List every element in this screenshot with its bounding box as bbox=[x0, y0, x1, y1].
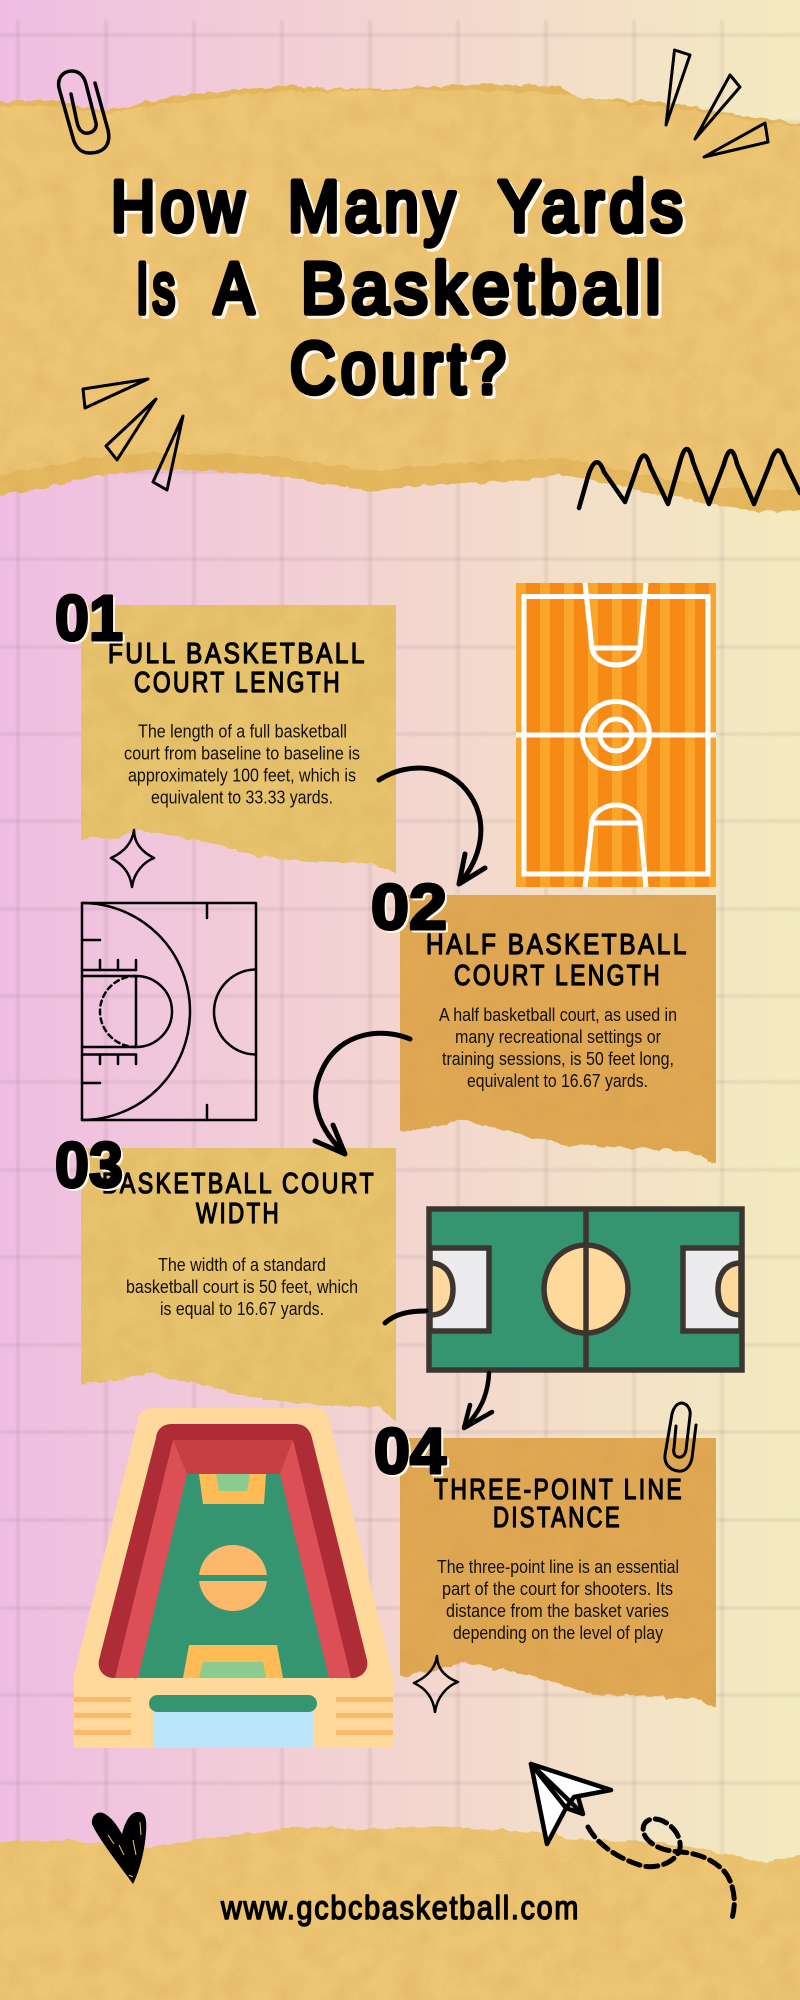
heading 2 bbox=[426, 929, 689, 992]
title: Court? bbox=[290, 329, 511, 409]
panel 1: full basketball court length bbox=[81, 605, 396, 874]
title: A bbox=[214, 249, 259, 329]
heading 2: HALF BASKETBALL bbox=[426, 929, 689, 961]
torn paper footer band bbox=[0, 1827, 800, 2000]
illustration: arcade court bbox=[74, 1408, 393, 1748]
arrow: panel 2 to panel 3 bbox=[315, 1033, 410, 1154]
body text 1: approximately 100 feet, which is bbox=[128, 766, 356, 786]
panel 3: basketball court width bbox=[81, 1148, 396, 1422]
torn paper title band bbox=[0, 84, 800, 512]
body text 3 bbox=[126, 1255, 358, 1319]
heading 4: THREE-POINT LINE bbox=[434, 1474, 684, 1506]
heading 3 bbox=[102, 1168, 376, 1230]
panel 4: three-point line distance bbox=[400, 1438, 716, 1708]
body text 4: depending on the level of play bbox=[453, 1623, 663, 1643]
icon: spikes top right bbox=[666, 50, 768, 157]
body text 4: The three-point line is an essential bbox=[437, 1557, 679, 1577]
body text 2: training sessions, is 50 feet long, bbox=[442, 1049, 674, 1069]
icon: spikes lower left bbox=[83, 379, 183, 490]
body text 1: court from baseline to baseline is bbox=[124, 744, 360, 764]
panel 2: half basketball court length bbox=[400, 895, 716, 1164]
title: Basketball bbox=[301, 249, 666, 329]
illustration: line drawing half court bbox=[82, 903, 256, 1120]
icon: sparkle 1 bbox=[111, 830, 154, 887]
heading 1 bbox=[108, 638, 367, 699]
arrow: panel 1 to panel 2 bbox=[379, 768, 485, 884]
heading 2: COURT LENGTH bbox=[454, 960, 662, 992]
arrow: connector from panel 3 bbox=[385, 1311, 426, 1323]
body text 2: equivalent to 16.67 yards. bbox=[467, 1071, 648, 1091]
icon: zigzag bbox=[579, 449, 800, 508]
icon: paperclip top left bbox=[59, 71, 109, 153]
illustration: green court bbox=[429, 1209, 742, 1370]
title: Yards bbox=[498, 167, 688, 247]
body text 1: The length of a full basketball bbox=[138, 722, 347, 742]
body text 4 bbox=[437, 1557, 679, 1643]
body text 3: The width of a standard bbox=[158, 1255, 326, 1275]
heading 3: BASKETBALL COURT bbox=[102, 1168, 376, 1200]
body text 3: is equal to 16.67 yards. bbox=[160, 1299, 324, 1319]
body text 1 bbox=[124, 722, 360, 808]
footer url: www.gcbcbasketball.com bbox=[220, 1889, 580, 1926]
title: How bbox=[111, 167, 249, 247]
title bbox=[111, 167, 688, 409]
body text 4: distance from the basket varies bbox=[446, 1601, 669, 1621]
illustration: orange full court bbox=[516, 583, 716, 887]
body text 1: equivalent to 33.33 yards. bbox=[151, 788, 333, 808]
title: Is bbox=[136, 249, 179, 329]
title: Many bbox=[288, 167, 460, 247]
heading 4 bbox=[434, 1474, 684, 1534]
icon: sparkle 2 bbox=[414, 1656, 458, 1712]
heading 4: DISTANCE bbox=[493, 1502, 622, 1534]
number 04: 04 bbox=[374, 1415, 446, 1487]
number 01: 01 bbox=[55, 582, 123, 654]
body text 2: A half basketball court, as used in bbox=[439, 1005, 677, 1025]
icon: dashed flight path bbox=[588, 1819, 734, 1918]
body text 4: part of the court for shooters. Its bbox=[442, 1579, 673, 1599]
heading 3: WIDTH bbox=[196, 1198, 281, 1230]
heading 1: COURT LENGTH bbox=[134, 667, 342, 699]
icon: paperclip panel 4 bbox=[665, 1403, 696, 1471]
icon: paper plane bbox=[531, 1764, 611, 1844]
body text 3: basketball court is 50 feet, which bbox=[126, 1277, 358, 1297]
body text 2 bbox=[439, 1005, 677, 1091]
number 02: 02 bbox=[371, 871, 447, 943]
number 03: 03 bbox=[55, 1129, 123, 1201]
arrow: green court to panel 4 bbox=[464, 1373, 492, 1428]
heading 1: FULL BASKETBALL bbox=[108, 638, 367, 670]
icon: heart bbox=[92, 1812, 146, 1884]
body text 2: many recreational settings or bbox=[455, 1027, 661, 1047]
